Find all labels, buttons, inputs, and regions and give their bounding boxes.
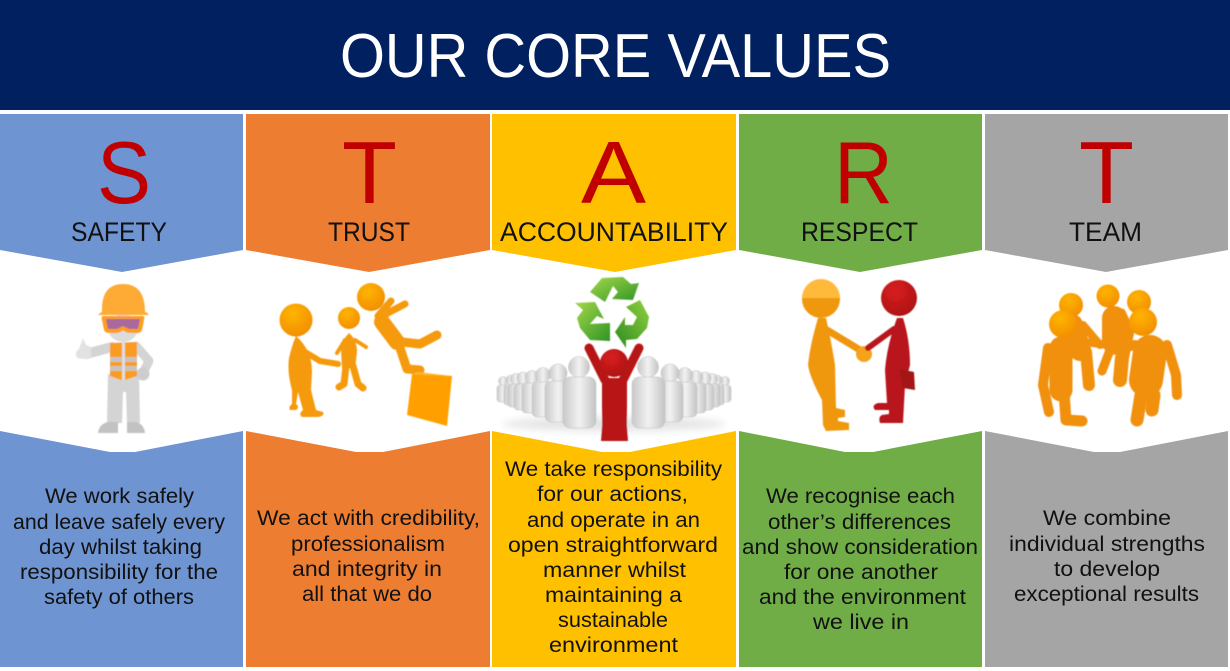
- gold figure: [802, 279, 872, 431]
- panel: respect: [739, 114, 982, 667]
- accountability description: environment: [549, 634, 678, 657]
- accountability description panel: [492, 431, 736, 667]
- safety description: We work safely: [45, 485, 195, 508]
- icon: safety worker: [76, 284, 150, 433]
- accountability description: for our actions,: [537, 483, 688, 506]
- safety header chevron: [0, 114, 243, 272]
- team description panel: [985, 431, 1228, 667]
- team label: TEAM: [1069, 217, 1142, 247]
- team description: exceptional results: [1014, 583, 1199, 606]
- respect description: we live in: [812, 611, 909, 634]
- icon: leader with recycling symbol and crowd: [497, 277, 731, 441]
- safety description: day whilst taking: [39, 536, 202, 559]
- panel: accountability: [492, 114, 736, 667]
- trust letter: T: [342, 123, 397, 222]
- front right figure: [1112, 308, 1177, 420]
- crowd: [497, 356, 731, 431]
- team description: [1009, 507, 1205, 606]
- trust description: all that we do: [302, 583, 432, 606]
- team header chevron: [985, 114, 1228, 272]
- safety description: responsibility for the: [20, 561, 218, 584]
- trust description panel: [246, 431, 490, 667]
- panel: trust: [246, 114, 490, 667]
- red leader: [589, 348, 639, 441]
- respect description: and the environment: [759, 586, 966, 609]
- falling figure: [357, 283, 437, 370]
- trust description: professionalism: [291, 533, 445, 556]
- respect label: RESPECT: [801, 217, 918, 247]
- trust label: TRUST: [328, 217, 410, 247]
- respect letter: R: [834, 123, 893, 222]
- accountability description: and operate in an: [527, 509, 700, 532]
- accountability description: open straightforward: [508, 534, 718, 557]
- panel: safety: [0, 114, 243, 667]
- safety description: safety of others: [44, 586, 194, 609]
- trust description: We act with credibility,: [257, 507, 480, 530]
- recycling symbol: [575, 277, 649, 348]
- middle figure: [337, 307, 366, 388]
- title banner: [0, 0, 1230, 110]
- red figure: [868, 280, 917, 423]
- accountability description: maintaining a: [545, 584, 682, 607]
- title: OUR CORE VALUES: [340, 22, 891, 91]
- center figure: [1096, 284, 1128, 380]
- trust description: and integrity in: [292, 558, 442, 581]
- team description: We combine: [1043, 507, 1171, 530]
- accountability description: sustainable: [558, 609, 668, 632]
- panel: team: [985, 114, 1228, 667]
- accountability label: ACCOUNTABILITY: [500, 217, 728, 247]
- respect description panel: [739, 431, 982, 667]
- accountability description: We take responsibility: [505, 458, 723, 481]
- icon: two figures shaking hands: [802, 279, 917, 431]
- icon: figures catching a falling person: [280, 283, 452, 426]
- safety description: [13, 485, 225, 609]
- safety label: SAFETY: [71, 217, 167, 247]
- trust header chevron: [246, 114, 490, 272]
- trust description: [257, 507, 480, 606]
- icon: team huddle with hands together: [1043, 284, 1177, 421]
- team description: to develop: [1054, 558, 1160, 581]
- safety description panel: [0, 431, 243, 667]
- safety letter: S: [97, 123, 151, 222]
- respect description: and show consideration: [742, 536, 978, 559]
- safety description: and leave safely every: [13, 511, 225, 534]
- respect header chevron: [739, 114, 982, 272]
- back figures: [1059, 290, 1151, 385]
- respect description: [742, 485, 978, 634]
- front left figure: [1043, 310, 1108, 421]
- team description: individual strengths: [1009, 533, 1205, 556]
- team letter: T: [1079, 123, 1134, 222]
- box: [407, 372, 452, 426]
- accountability header chevron: [492, 114, 736, 272]
- respect description: We recognise each: [766, 485, 955, 508]
- left figure: [280, 304, 338, 417]
- accountability description: [505, 458, 723, 657]
- accountability description: manner whilst: [543, 559, 686, 582]
- accountability letter: A: [581, 123, 646, 222]
- respect description: for one another: [784, 561, 938, 584]
- respect description: other’s differences: [768, 511, 951, 534]
